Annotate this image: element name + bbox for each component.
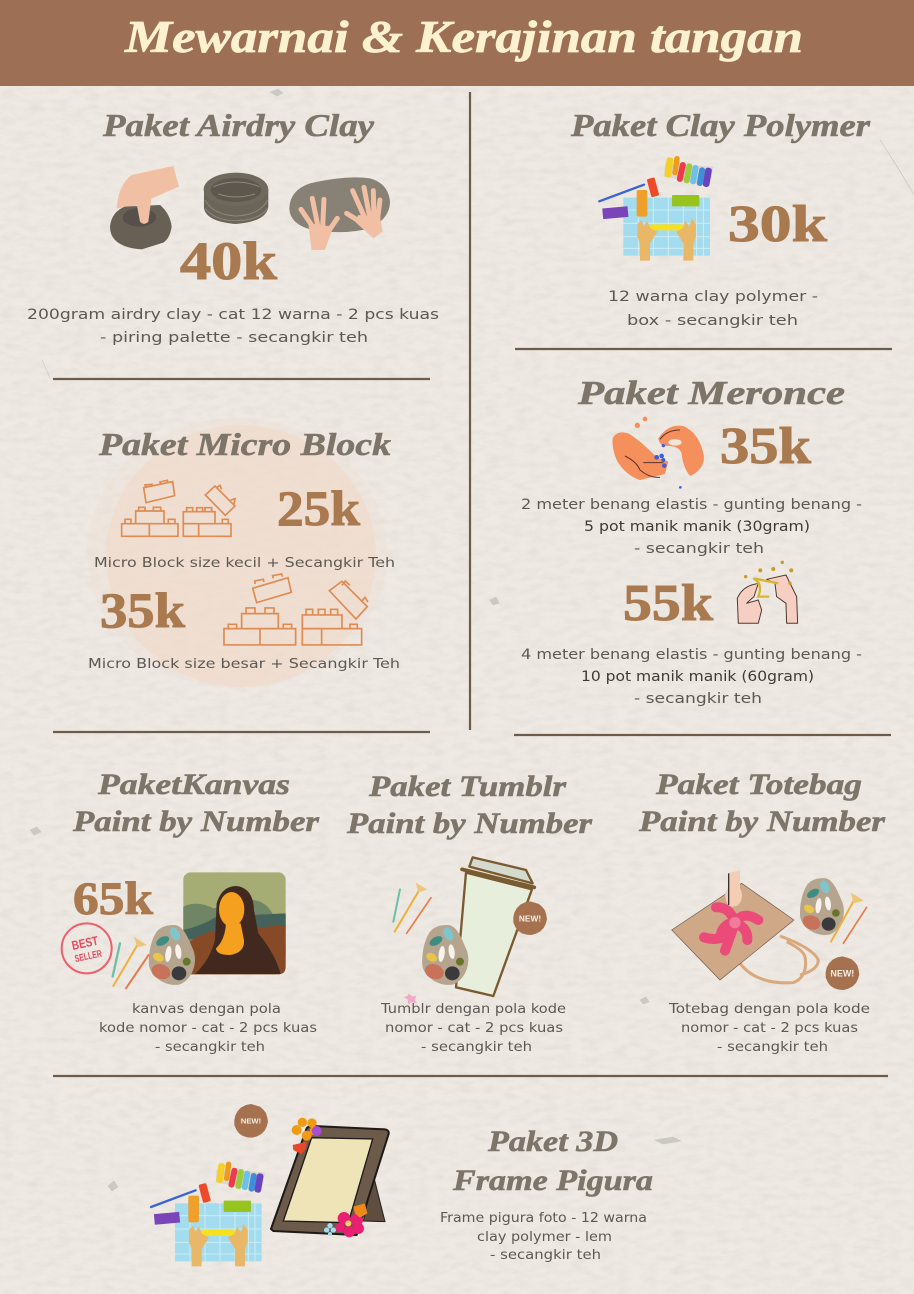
heading: Paket Kanvas: PaketKanvas [97,768,290,801]
heading: Paket 3D Frame Pigura: Frame Pigura [452,1164,653,1197]
price: 35k: 35k [100,582,185,638]
text: contents [608,289,818,329]
heading: Paket Totebag [638,768,885,838]
dividers [53,92,892,1076]
heading: Paket Micro Block: Paket Micro Block [98,426,391,462]
text: contents: 12 warna clay polymer - [608,289,818,305]
text: 4 meter contents [521,647,862,707]
decorative circle [87,418,387,688]
text: contents: kanvas dengan pola [132,1001,281,1017]
text: 4 meter contents: 4 meter benang elastis - gunting benang - [521,647,862,663]
text: contents: - piring palette - secangkir teh [100,330,368,346]
title: Mewarnai & Kerajinan tangan [124,12,803,62]
text: contents: - secangkir teh [717,1039,828,1055]
heading: Paket Kanvas [72,768,319,838]
text: contents [668,1001,870,1055]
heading: Paket Tumblr: Paket Tumblr [368,770,566,803]
icon: new badge [234,1104,268,1138]
text: 2 meter contents [521,497,862,557]
heading: Paket Tumblr [346,770,592,840]
text: contents: Tumblr dengan pola kode [380,1001,566,1017]
icon: orange hands with beads [612,417,704,489]
icon: best seller stamp: SELLER [74,949,103,965]
text: contents: - secangkir teh [490,1247,601,1263]
icon: clay kit [151,1161,265,1266]
panel: Paket Tumblr [346,770,592,1055]
icon: clay illustrations [110,166,390,250]
text: contents: Frame pigura foto - 12 warna [440,1210,647,1226]
panel: Paket Airdry Clay [27,107,439,346]
text: 2 meter contents: - secangkir teh [634,541,764,557]
price: 35k: 35k [720,418,811,475]
text: contents [99,1001,317,1055]
icon: new badge: NEW! [519,913,541,923]
heading: Paket Clay Polymer: Paket Clay Polymer [570,107,871,143]
text: contents: clay polymer - lem [477,1229,612,1245]
icon: new badge: NEW! [241,1117,261,1126]
icon: photo frame with flowers [271,1118,389,1237]
header banner [0,0,914,86]
icon: tumbler with palette [393,857,547,1005]
heading: Paket 3D Frame Pigura: Paket 3D [487,1125,618,1158]
icon: small blocks [122,480,235,536]
icon: pink hands with beads [737,561,798,623]
text: contents: kode nomor - cat - 2 pcs kuas [99,1020,317,1036]
heading: Paket Kanvas: Paint by Number [72,805,319,838]
text: contents: - secangkir teh [155,1039,265,1055]
heading: Paket Totebag: Paint by Number [638,805,885,838]
text: contents: box - secangkir teh [627,313,798,329]
text: 2 meter contents: 2 meter benang elastis - gunting benang - [521,497,862,513]
heading: Paket Meronce: Paket Meronce [577,375,845,412]
panel: Paket Kanvas [62,768,319,1055]
text: contents [440,1210,647,1263]
price: 25k: 25k [277,480,360,536]
icon: new badge: NEW! [830,969,854,979]
icon: new badge [826,956,859,990]
text: contents: nomor - cat - 2 pcs kuas [385,1020,563,1036]
text: contents: nomor - cat - 2 pcs kuas [681,1020,858,1036]
price: 40k: 40k [180,231,277,291]
panel: Paket 3D Frame Pigura [151,1104,653,1266]
text: contents: Totebag dengan pola kode [668,1001,870,1017]
heading: Paket 3D Frame Pigura [452,1125,653,1197]
icon: best seller stamp: BEST [71,934,100,953]
icon: brushes and palette [113,925,195,988]
icon: clay kit [599,156,713,261]
text: contents: - secangkir teh [421,1039,532,1055]
panel: Paket Totebag [638,768,885,1055]
text: contents [380,1001,566,1055]
text: 4 meter contents: 10 pot manik manik (60gram) [581,669,814,685]
heading: Paket Totebag: Paket Totebag [655,768,862,801]
text: contents: 200gram airdry clay - cat 12 warna - 2 pcs kuas [27,307,439,323]
text: large block contents: Micro Block size besar + Secangkir Teh [88,656,400,672]
text: 4 meter contents: - secangkir teh [634,691,762,707]
price: 65k: 65k [73,873,154,925]
text: small block contents: Micro Block size kecil + Secangkir Teh [94,555,395,571]
panel: Paket Clay Polymer [570,107,871,329]
price: 55k: 55k [623,575,713,632]
heading: Paket Airdry Clay: Paket Airdry Clay [102,107,375,143]
icon: new badge [513,901,547,935]
icon: paint by number canvas [183,872,286,974]
price: 30k: 30k [728,196,827,253]
text: 2 meter contents: 5 pot manik manik (30gram) [584,519,810,535]
text: contents [27,307,439,346]
icon: best seller stamp [62,923,112,973]
panel: Paket Micro Block [87,418,400,688]
panel: Paket Meronce [521,375,862,707]
icon: large blocks [224,574,368,645]
heading: Paket Tumblr: Paint by Number [346,807,592,840]
icon: totebag with palette [672,871,867,990]
